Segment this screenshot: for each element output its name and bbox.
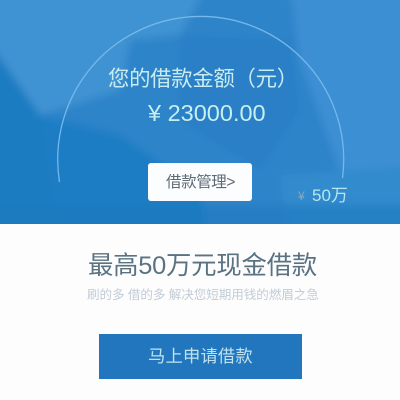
gauge maximum label: ¥ <box>298 189 305 203</box>
button: loan management <box>148 163 252 201</box>
button: loan management: 借款管理> <box>166 174 235 191</box>
heading: up to 500k cash loan: 最高50万元现金借款 <box>88 252 317 280</box>
button: apply now: 马上申请借款 <box>148 346 253 366</box>
subtitle text: 刷的多 借的多 解决您短期用钱的燃眉之急 <box>87 288 319 302</box>
gauge maximum label: 50万 <box>312 186 348 205</box>
heading: loan amount label: 您的借款金额（元） <box>108 67 298 91</box>
panel: blue header background <box>0 0 400 224</box>
button: apply now <box>99 334 302 379</box>
gauge arc <box>57 16 344 182</box>
amount value: ¥ 23000.00 <box>148 100 266 126</box>
